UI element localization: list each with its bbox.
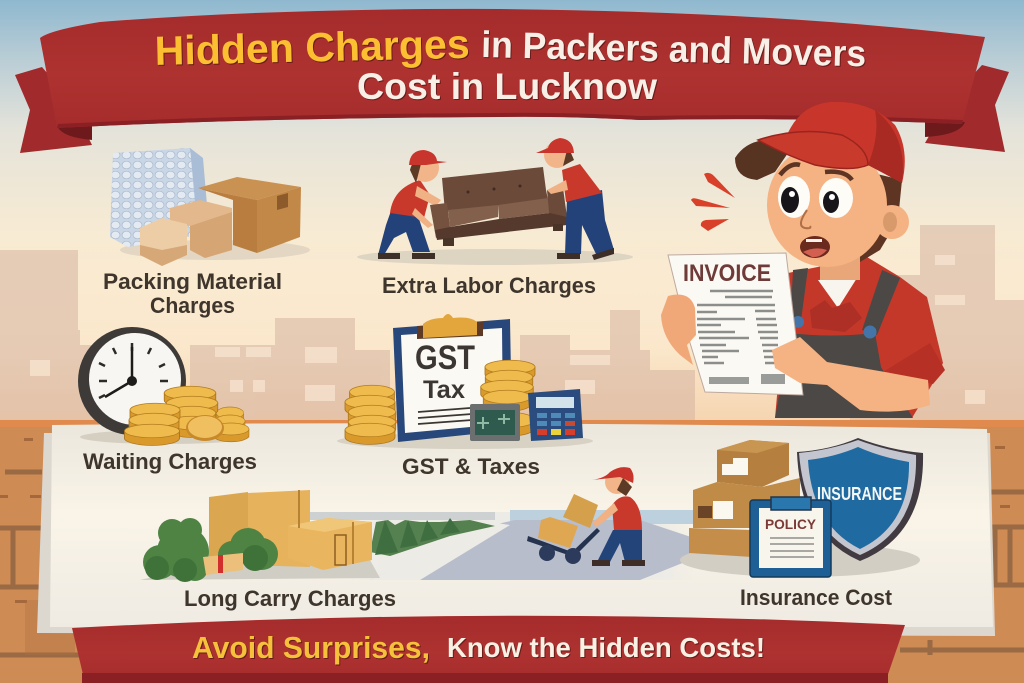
icon: road, boxes, bushes and mover with trolley xyxy=(140,467,700,582)
surprised man holding invoice xyxy=(661,102,945,418)
bottom tagline: Know the Hidden Costs! xyxy=(447,632,765,663)
label: packing material charges: Charges xyxy=(150,293,235,318)
label: packing material charges xyxy=(103,269,282,318)
icon: boxes, policy clipboard and shield: POLICY xyxy=(765,516,817,532)
icon: two movers carrying a sofa xyxy=(357,138,633,265)
bottom tagline xyxy=(192,630,765,665)
left hand xyxy=(661,294,696,365)
bottom ribbon banner xyxy=(72,616,905,683)
invoice sheet: INVOICE xyxy=(683,260,771,287)
icon: gst clipboard, coins and calculator: Tax xyxy=(423,376,465,404)
top ribbon banner xyxy=(15,9,1009,153)
sofa xyxy=(430,167,567,246)
bottom tagline: Avoid Surprises, xyxy=(192,630,430,665)
item: gst and taxes xyxy=(337,314,593,479)
icon: boxes, policy clipboard and shield xyxy=(680,438,923,577)
label: packing material charges: Packing Material xyxy=(103,269,282,294)
small mover with trolley xyxy=(527,467,645,566)
item: waiting charges xyxy=(78,327,257,474)
worry marks xyxy=(691,173,735,231)
icon: bubble wrap and boxes xyxy=(110,148,310,266)
item: insurance cost xyxy=(680,438,923,610)
item: extra labor charges xyxy=(357,138,633,298)
label: waiting charges: Waiting Charges xyxy=(83,449,257,474)
invoice sheet xyxy=(668,253,803,395)
icon: gst clipboard, coins and calculator xyxy=(337,314,593,449)
title: Cost in Lucknow xyxy=(357,66,657,107)
icon: boxes, policy clipboard and shield: INSURANCE xyxy=(817,484,902,504)
brick wall xyxy=(0,420,1024,683)
icon: gst clipboard, coins and calculator: GST xyxy=(415,339,475,377)
label: extra labor charges: Extra Labor Charges xyxy=(382,273,596,298)
item: long carry charges xyxy=(140,467,700,611)
background: sky and skyline xyxy=(0,0,1024,430)
item: packing material charges xyxy=(103,148,310,318)
label: gst and taxes: GST & Taxes xyxy=(402,454,540,479)
label: insurance cost: Insurance Cost xyxy=(740,585,892,610)
right mover xyxy=(536,138,614,260)
paper panel xyxy=(37,423,995,636)
torso with shirt and overalls xyxy=(775,257,945,418)
right hand and forearm xyxy=(772,337,930,412)
title xyxy=(154,21,867,107)
left mover xyxy=(378,150,447,259)
icon: clock with coins xyxy=(78,327,250,445)
title: in Packers and Movers xyxy=(481,24,867,74)
title: Hidden Charges xyxy=(154,21,470,74)
head with cap xyxy=(735,102,909,280)
label: long carry charges: Long Carry Charges xyxy=(184,586,396,611)
